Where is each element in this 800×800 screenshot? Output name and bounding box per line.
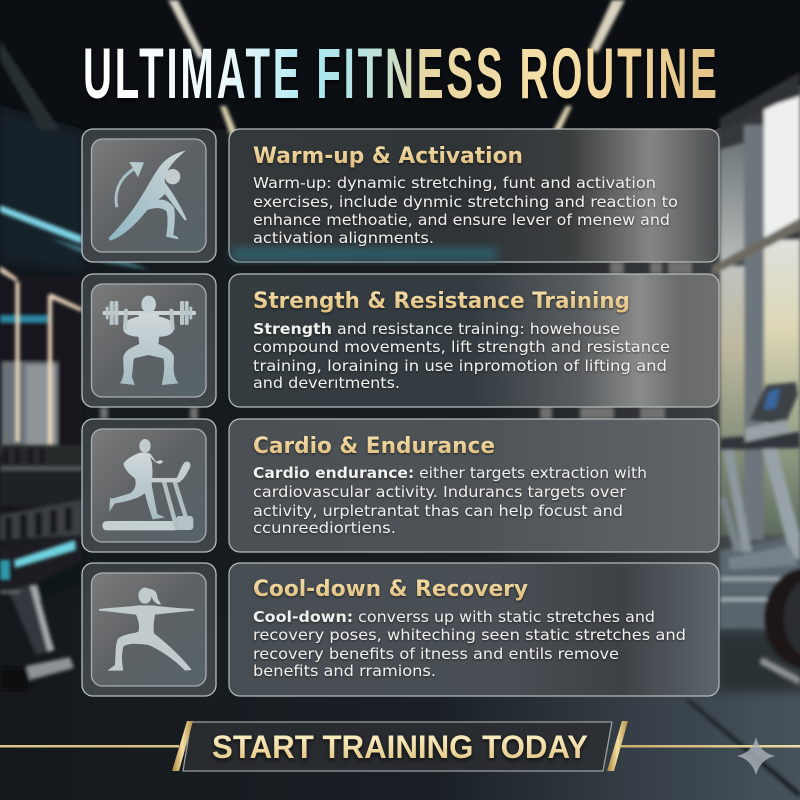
body text bbox=[253, 608, 686, 680]
body text: Warm-up: dynamic stretching, funt and activation bbox=[253, 174, 656, 192]
floor reflection line bbox=[686, 700, 800, 798]
title: ULTIMATE FITNESS ROUTINE bbox=[83, 35, 717, 114]
ceiling light streaks bbox=[0, 0, 625, 140]
panel: strength bbox=[229, 274, 719, 407]
panel: cool-down bbox=[229, 563, 719, 696]
heading: Cool-down & Recovery bbox=[253, 577, 528, 602]
body text bbox=[253, 320, 670, 392]
window panes bbox=[712, 72, 800, 540]
cardio wheel bbox=[764, 568, 800, 668]
weight bench bbox=[0, 562, 82, 690]
body text: enhance methoatie, and ensure lever of menew and bbox=[253, 211, 670, 229]
body text: recovery benefits of itness and entils remove bbox=[253, 645, 619, 663]
icon card: cardio bbox=[82, 419, 216, 552]
icon: warrior yoga pose bbox=[99, 588, 194, 671]
icon: sparkle bbox=[737, 737, 775, 775]
body text: Cool-down: converss up with static stretches and bbox=[253, 608, 655, 626]
body text: activation alignments. bbox=[253, 229, 434, 247]
body text: benefits and rramions. bbox=[253, 662, 436, 680]
body text bbox=[253, 464, 647, 537]
call-to-action banner bbox=[0, 721, 800, 771]
heading: Strength & Resistance Training bbox=[253, 289, 630, 314]
heading: Cardio & Endurance bbox=[253, 434, 495, 459]
body text: activity, urpletrantat thas can help focust and bbox=[253, 502, 623, 520]
body text: Cardio endurance: either targets extraction with bbox=[253, 464, 647, 482]
body text: Strength and resistance training: howehouse bbox=[253, 320, 620, 338]
icon card: strength bbox=[82, 274, 216, 407]
banner label: START TRAINING TODAY bbox=[212, 729, 588, 765]
light bars between panels bbox=[100, 262, 692, 419]
icon: runner on treadmill bbox=[102, 439, 193, 530]
dumbbell racks bbox=[0, 445, 82, 590]
body text: cardiovascular activity. Indurancs targets over bbox=[253, 483, 627, 501]
left wall: cyan streaks, mirror and light strips bbox=[0, 205, 150, 690]
body text: and deverıtments. bbox=[253, 374, 400, 392]
body text: training, loraining in use inpromotion of lifting and bbox=[253, 357, 667, 375]
treadmill in background bbox=[720, 382, 800, 692]
body text: recovery poses, whiteching seen static stretches and bbox=[253, 626, 686, 644]
icon: side stretch figure with arrow bbox=[108, 151, 187, 241]
body text: compound movements, lift strength and resistance bbox=[253, 338, 670, 356]
body text: ccunreediortiens. bbox=[253, 519, 396, 537]
dark floor patch right bbox=[715, 632, 800, 692]
panel: cardio bbox=[229, 419, 719, 552]
heading: Warm-up & Activation bbox=[253, 144, 523, 169]
icon: squat with barbell bbox=[103, 296, 196, 385]
icon card: cool-down bbox=[82, 563, 216, 696]
panel: warm-up bbox=[229, 129, 719, 262]
icon card: warm-up bbox=[82, 129, 216, 262]
body text bbox=[253, 174, 678, 247]
body text: exercises, include dynmic stretching and reaction to bbox=[253, 193, 678, 211]
